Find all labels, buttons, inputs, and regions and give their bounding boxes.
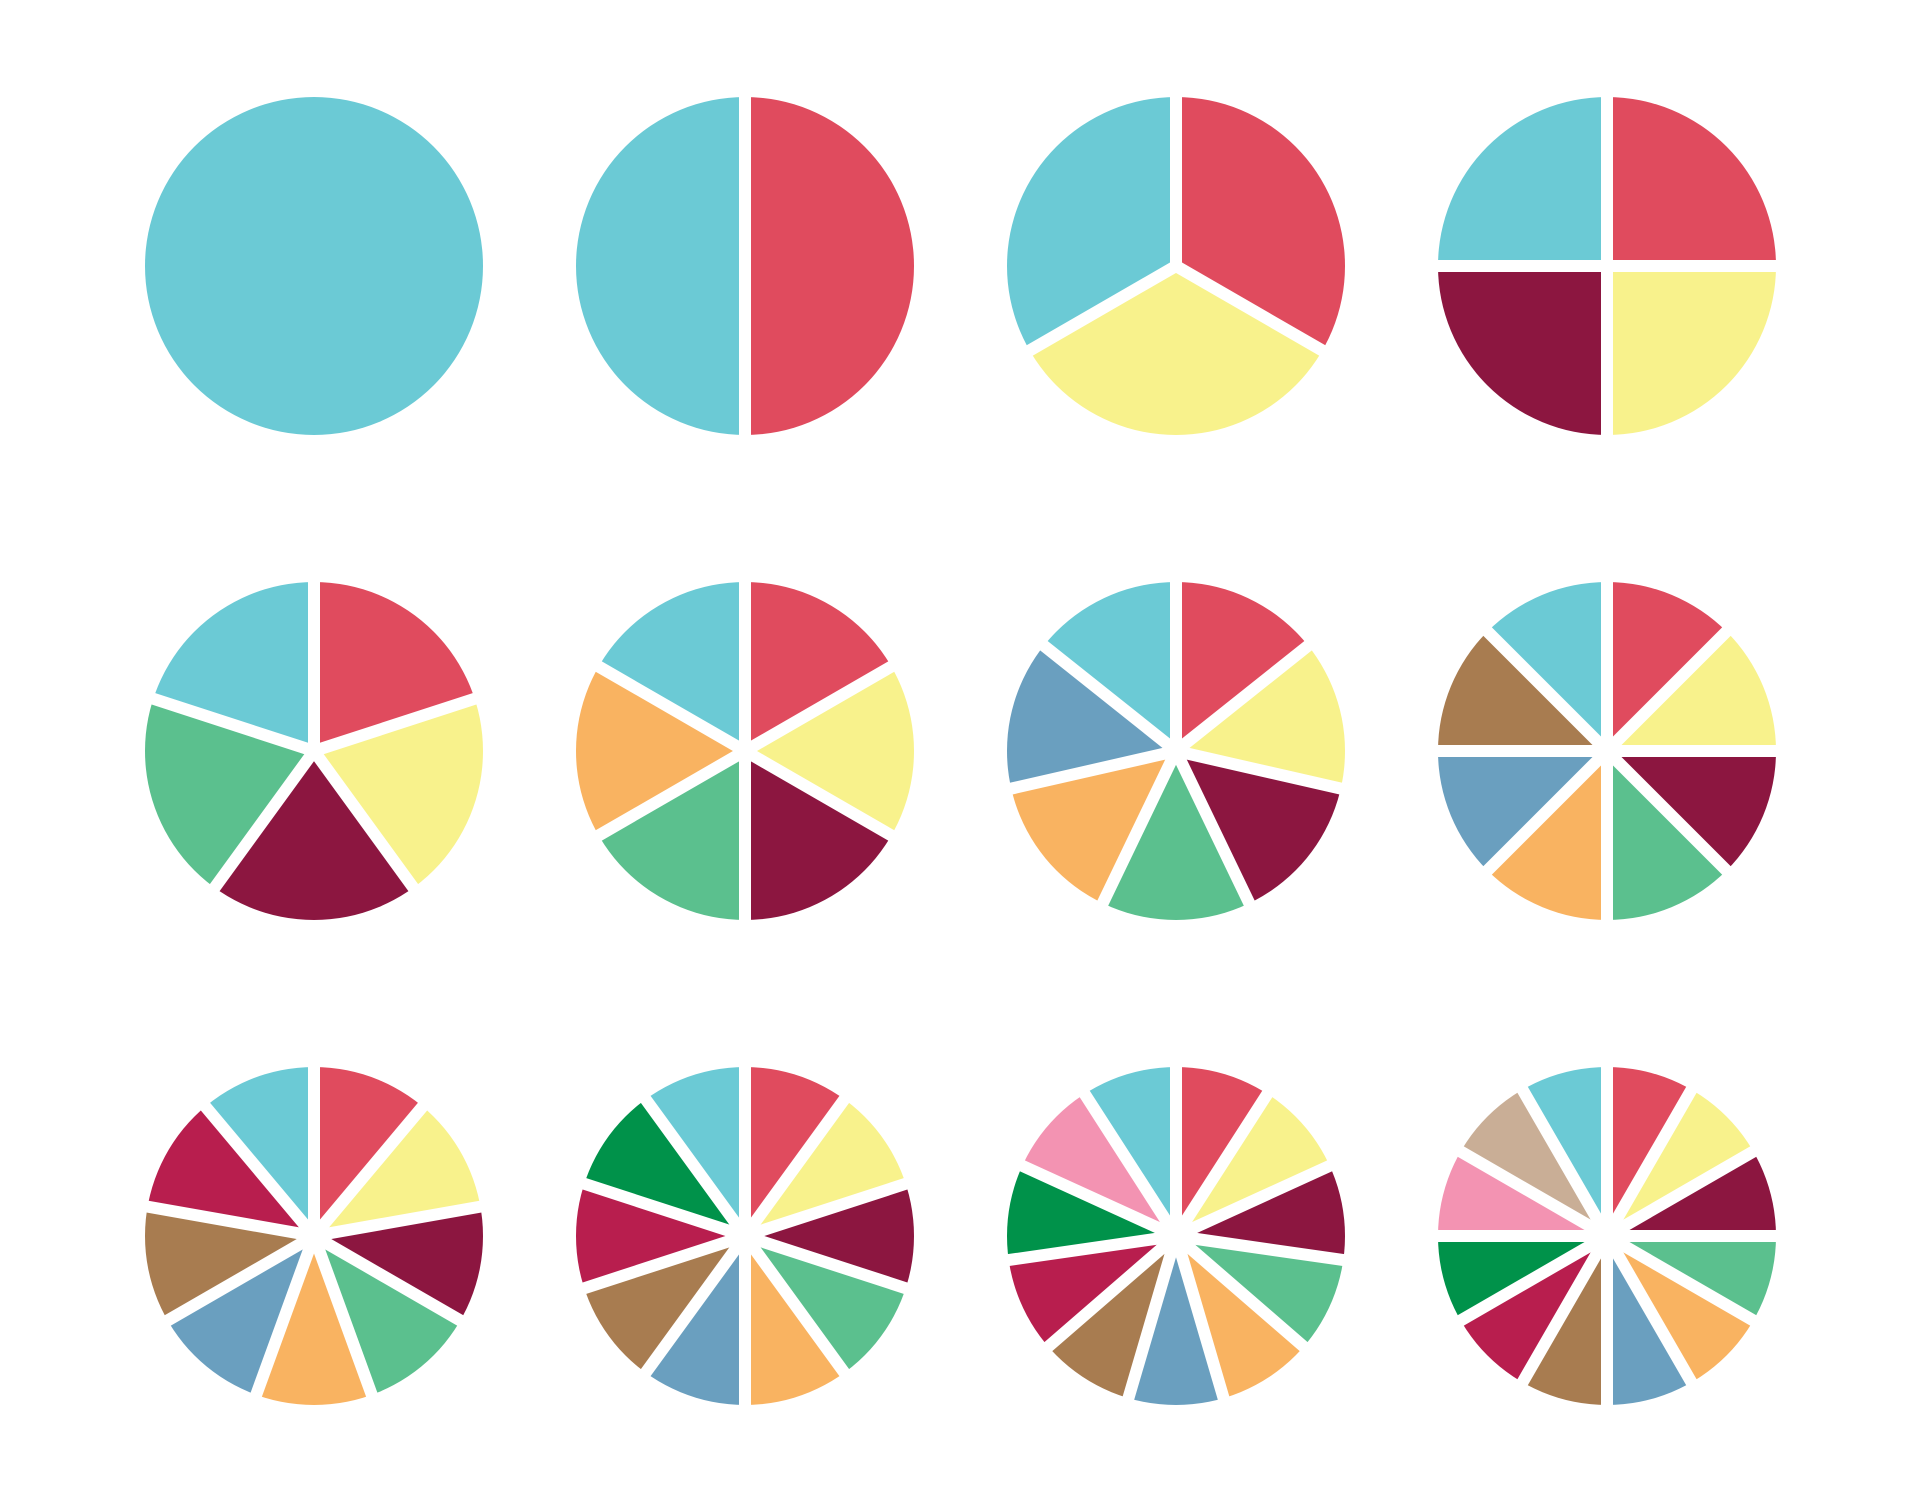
pie: 12 segments bbox=[1438, 1066, 1776, 1404]
pie: 9 segments bbox=[144, 1066, 482, 1404]
pie: 2 segments bbox=[576, 97, 914, 435]
pie: 8 segments bbox=[1438, 582, 1776, 920]
pie: 11 segments bbox=[1006, 1066, 1344, 1404]
pie: 10 segments bbox=[576, 1066, 914, 1404]
pie: 1 segment bbox=[144, 97, 482, 435]
pie: 7 segments bbox=[1006, 582, 1344, 920]
pie: 6 segments bbox=[576, 582, 914, 920]
pie: 3 segments bbox=[1006, 97, 1344, 435]
pie: 4 segments bbox=[1438, 97, 1776, 435]
pie: 5 segments bbox=[144, 582, 482, 920]
